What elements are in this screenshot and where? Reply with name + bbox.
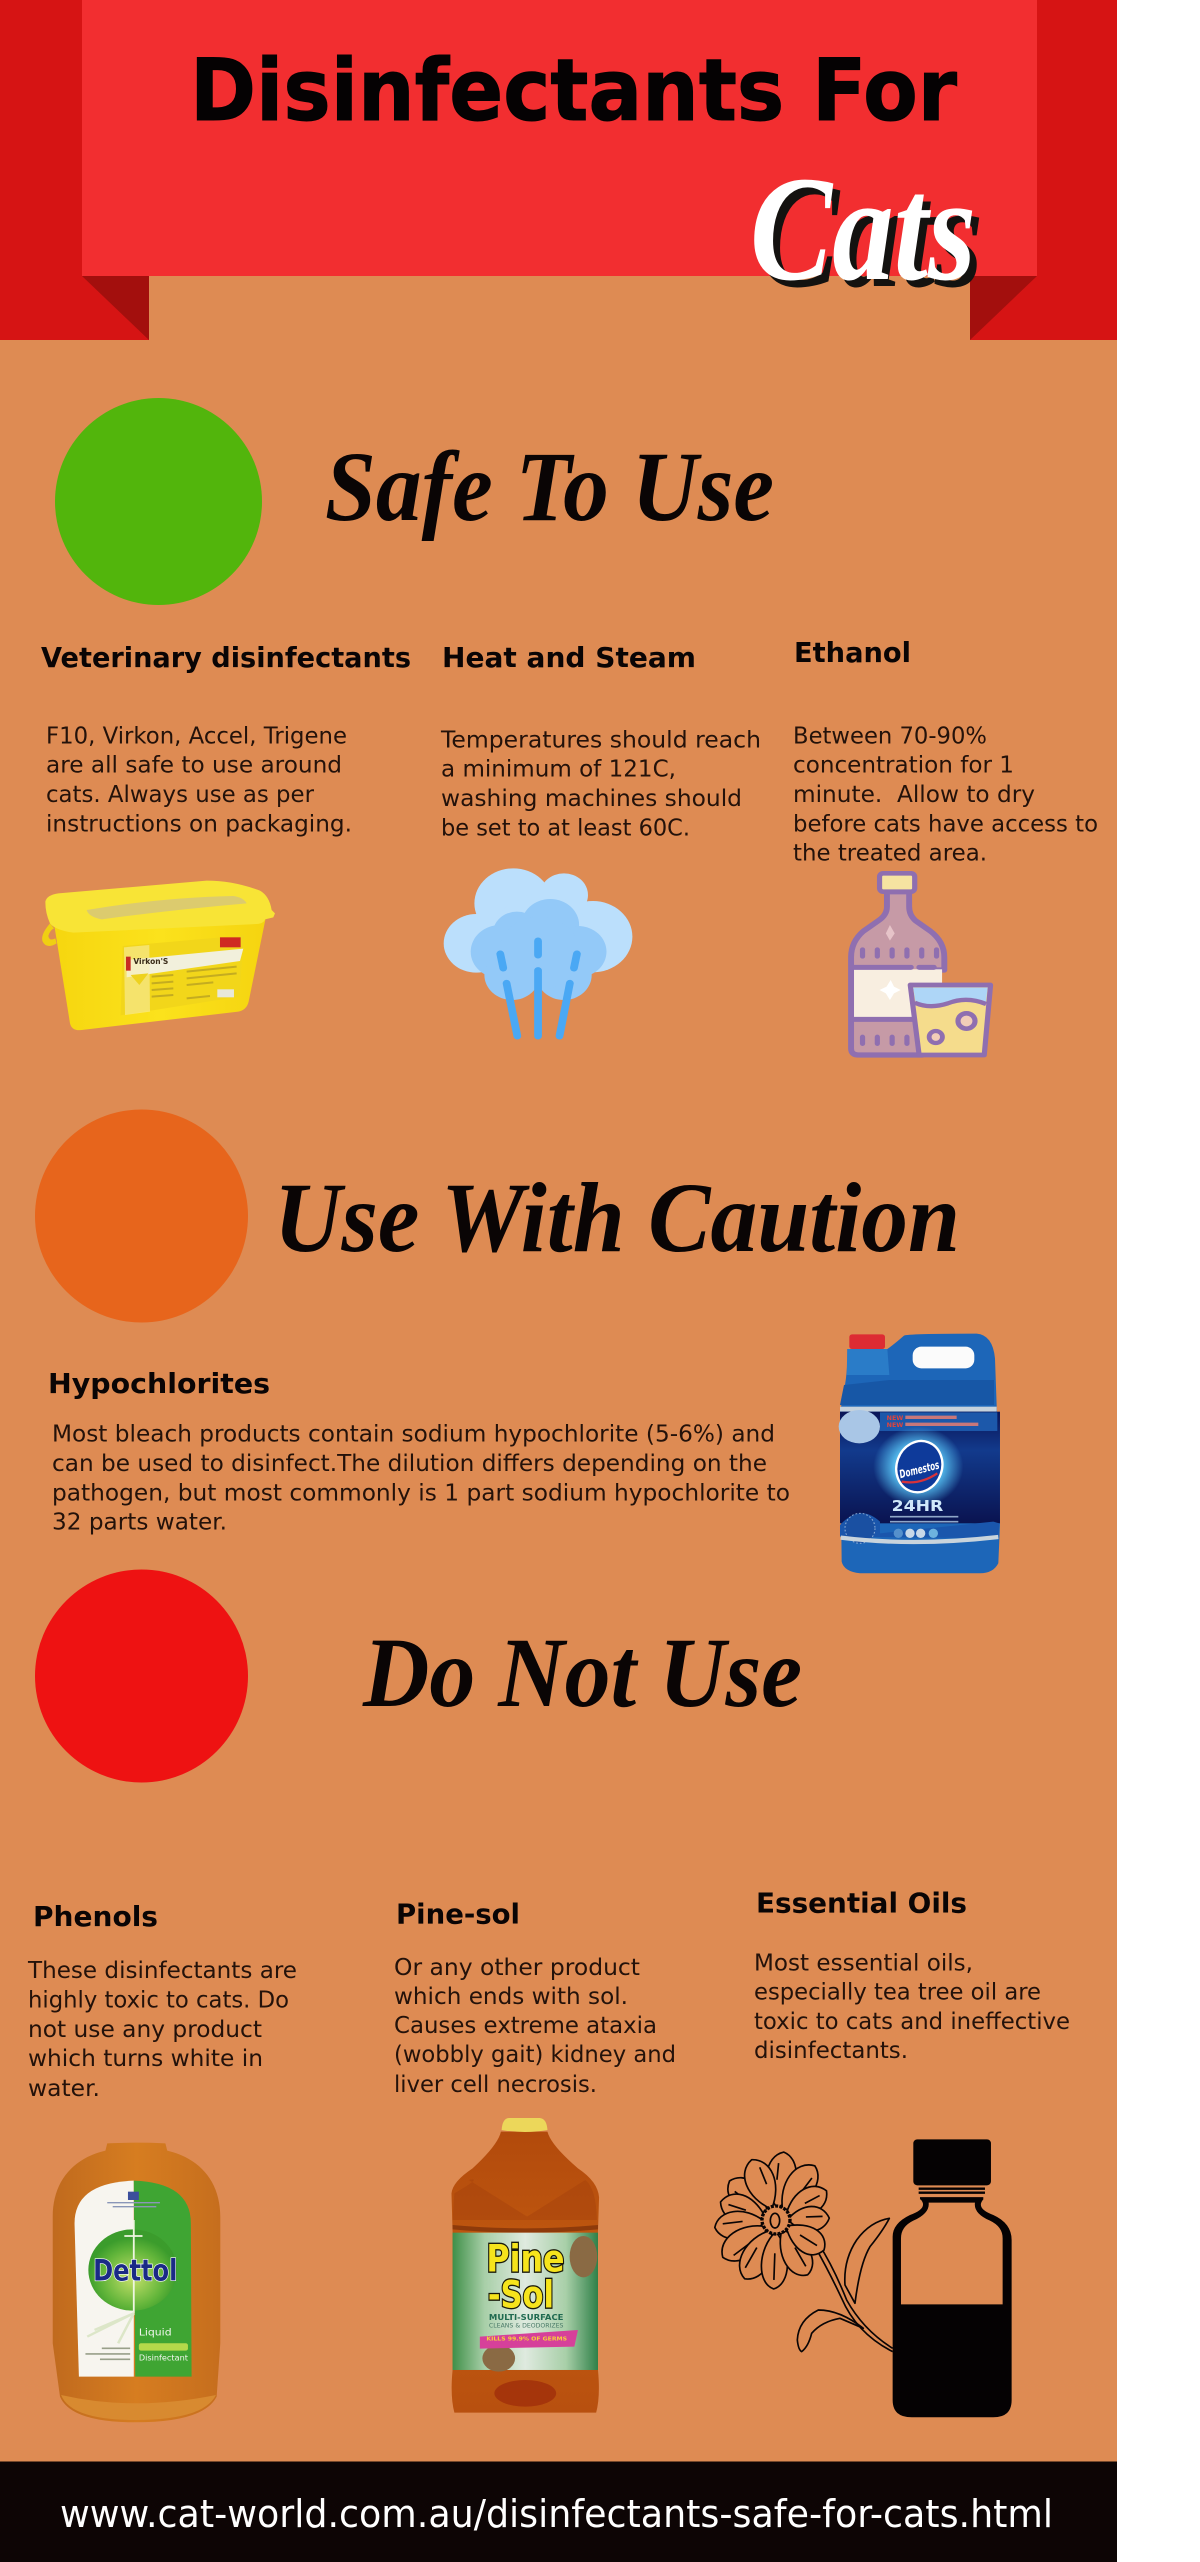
column: ethanol: Between 70-90% [793, 723, 987, 749]
image: Pine-Sol bottle: MULTI-SURFACE [489, 2313, 563, 2323]
column: ethanol: concentration for 1 [793, 753, 1014, 779]
column: pine-sol: Or any other product [394, 1955, 640, 1981]
column: essential oils: especially tea tree oil are [754, 1980, 1041, 2006]
column: pine-sol: Pine-sol [396, 1898, 520, 1930]
image: Dettol bottle [53, 2118, 599, 2422]
image: Domestos bottle [839, 1334, 1000, 1573]
image: Dettol bottle: Liquid [139, 2327, 172, 2338]
column: heat and steam: washing machines should [441, 786, 742, 812]
column: veterinary disinfectants: instructions on packaging. [46, 811, 352, 837]
column: phenols [27, 1900, 297, 2102]
title banner [0, 0, 1117, 340]
column: pine-sol: which ends with sol. [394, 1984, 628, 2010]
title: Cats: Cats [750, 146, 976, 312]
column: ethanol: Ethanol [794, 636, 911, 669]
heading: Safe To Use: Safe To Use [325, 431, 774, 542]
column: essential oils [754, 1887, 1070, 2064]
section: do not use [27, 1570, 1070, 2422]
image: Pine-Sol bottle: CLEANS & DEODORIZES [489, 2323, 563, 2329]
column: essential oils: Essential Oils [756, 1887, 967, 1920]
column: phenols: water. [28, 2076, 100, 2102]
column: phenols: not use any product [28, 2017, 262, 2043]
column: veterinary disinfectants: cats. Always use as per [46, 782, 315, 808]
image: Virkon S tub: Virkon'S [133, 957, 169, 966]
column: phenols: which turns white in [28, 2046, 263, 2072]
column: phenols: These disinfectants are [27, 1958, 297, 1984]
column: hypochlorites: Hypochlorites [48, 1367, 270, 1400]
heading: Use With Caution: Use With Caution [274, 1162, 960, 1273]
column: phenols: highly toxic to cats. Do [28, 1987, 289, 2013]
image: Virkon S tub [42, 881, 275, 1030]
image: Pine-Sol bottle: -Sol [488, 2274, 554, 2317]
column: ethanol: before cats have access to [793, 811, 1098, 837]
column: heat and steam: Temperatures should reach [440, 727, 761, 753]
column: pine-sol: Causes extreme ataxia [394, 2013, 657, 2039]
column: veterinary disinfectants: Veterinary disinfectants [41, 641, 411, 674]
column: hypochlorites: Most bleach products contain sodium hypochlorite (5-6%) and [52, 1422, 775, 1448]
image: Pine-Sol bottle: Pine [486, 2238, 565, 2281]
icon: steam cloud [444, 868, 632, 1036]
red circle [35, 1570, 248, 1782]
image: Pine-Sol bottle: KILLS 99.9% OF GERMS [486, 2337, 567, 2343]
section: use with caution [35, 1110, 1000, 1573]
column: ethanol: the treated area. [793, 841, 987, 867]
column: heat and steam: be set to at least 60C. [441, 815, 690, 841]
image: Dettol bottle: Disinfectant [139, 2353, 189, 2363]
column: essential oils: disinfectants. [754, 2038, 908, 2064]
image: Dettol bottle: Dettol [93, 2255, 177, 2288]
footer bar [0, 2462, 1117, 2562]
column: essential oils: Most essential oils, [754, 1950, 973, 1976]
column: veterinary disinfectants: F10, Virkon, Accel, Trigene [46, 723, 347, 749]
image: Domestos bottle: NEW [887, 1422, 904, 1429]
column: heat and steam: a minimum of 121C, [441, 757, 676, 783]
image: Pine-Sol bottle [451, 2118, 599, 2413]
column: pine-sol [394, 1898, 676, 2098]
image: Domestos bottle: Domestos [898, 1458, 941, 1481]
footer url: www.cat-world.com.au/disinfectants-safe-for-cats.html [60, 2492, 1053, 2536]
green circle [55, 398, 262, 605]
column: heat and steam: Heat and Steam [442, 641, 696, 674]
column: hypochlorites [48, 1367, 790, 1536]
column: heat and steam [440, 641, 761, 841]
heading: Do Not Use: Do Not Use [362, 1617, 802, 1728]
image: Domestos bottle: 24HR [892, 1498, 943, 1515]
section: safe to use [41, 398, 1098, 1055]
column: pine-sol: (wobbly gait) kidney and [394, 2042, 676, 2068]
oil bottle [893, 2139, 1012, 2417]
column: hypochlorites: can be used to disinfect.The dilution differs depending on the [52, 1451, 767, 1477]
column: veterinary disinfectants: are all safe to use around [46, 753, 342, 779]
title: Cats: Cats [757, 153, 983, 319]
icon: bottle and glass [851, 873, 991, 1055]
column: phenols: Phenols [33, 1900, 158, 1933]
column: hypochlorites: 32 parts water. [52, 1510, 227, 1536]
column: ethanol: minute. Allow to dry [793, 782, 1035, 808]
orange circle [35, 1110, 248, 1322]
column: ethanol [793, 636, 1098, 867]
flower [713, 2150, 893, 2352]
icon: flower and essential oil bottle [713, 2139, 1012, 2417]
title: Disinfectants For: Disinfectants For [190, 41, 958, 141]
column: veterinary disinfectants [41, 641, 411, 837]
image: Domestos bottle: NEW [887, 1415, 904, 1422]
column: pine-sol: liver cell necrosis. [394, 2072, 597, 2098]
column: essential oils: toxic to cats and ineffective [754, 2009, 1070, 2035]
column: hypochlorites: pathogen, but most commonly is 1 part sodium hypochlorite to [52, 1480, 790, 1506]
